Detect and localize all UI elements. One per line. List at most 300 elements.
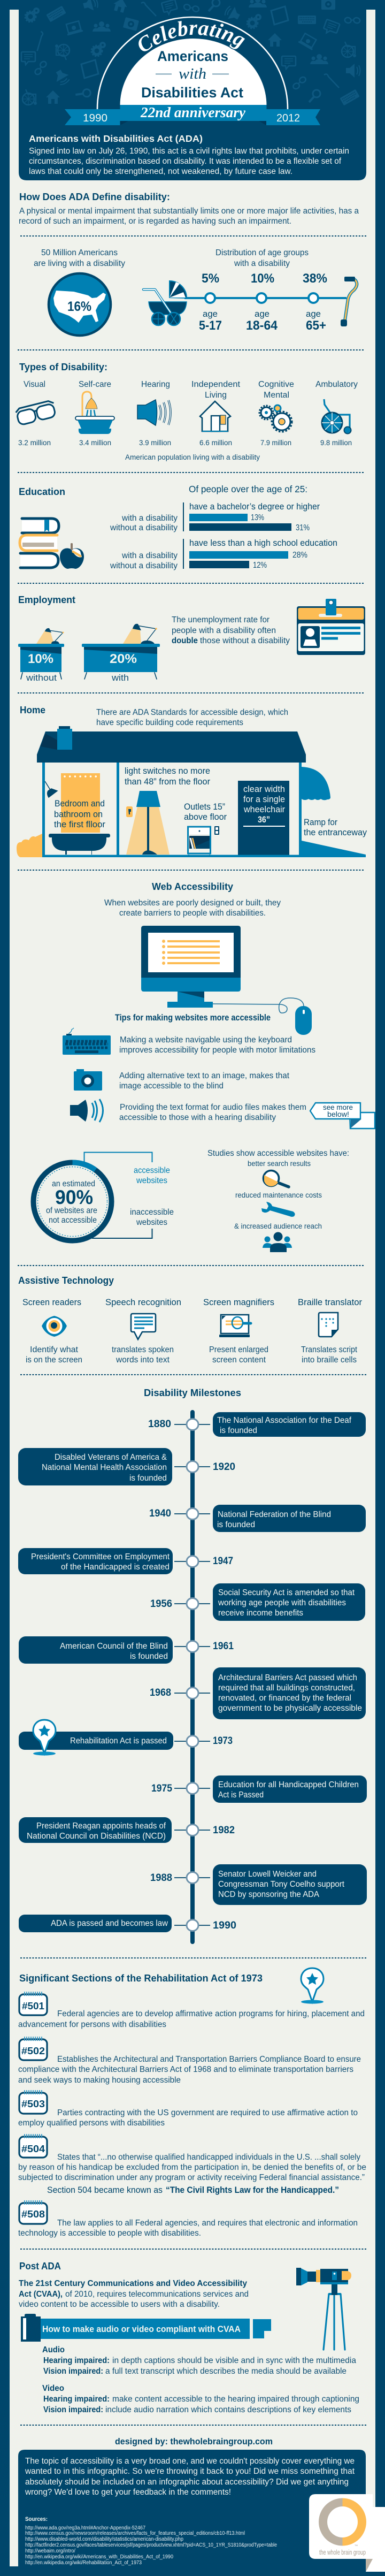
logo: the whole brain group: TM (355, 2544, 358, 2547)
milestone 1988: Congressman Tony Coelho support (218, 1880, 345, 1889)
definition text (19, 207, 359, 226)
label: better search: better search results (248, 1160, 311, 1168)
icon: keyboard (63, 1028, 111, 1055)
intro text: When websites are poorly designed or built, they (104, 898, 281, 908)
chart labels: accessible (134, 1166, 170, 1175)
milestone 1975: Act is Passed (218, 1790, 264, 1800)
tip: keyboard text: Making a website navigable using the keyboard (120, 1035, 292, 1045)
year 2012: 2012 (276, 112, 300, 124)
milestone 1975 (151, 1775, 367, 1803)
outlets label: above floor (184, 812, 227, 822)
milestone 1973: Rehabilitation Act is passed (70, 1736, 167, 1746)
column labels: Cognitive (258, 380, 294, 389)
ramp label (304, 818, 367, 837)
age values: age (255, 309, 270, 319)
section 504 (18, 2134, 366, 2195)
age values: 5% (202, 271, 219, 286)
heading: Disability Milestones (144, 1388, 241, 1398)
floor (42, 855, 366, 857)
section 504: subjected to discrimination under any program or activity receiving Federal financial assistance.” (18, 2173, 365, 2182)
icon: magnifier (263, 1171, 289, 1187)
milestone 1982 (19, 1817, 235, 1843)
label: audience: & increased audience reach (234, 1222, 322, 1230)
column labels (22, 1298, 363, 1307)
milestone 1920: Disabled Veterans of America & (55, 1453, 167, 1462)
closing text: wanted to in this infographic. So we're throwing it back to you! Did we miss something that (25, 2467, 355, 2476)
nightstand (188, 827, 211, 856)
counts: 9.8 million (320, 439, 352, 447)
milestone 1880: 1880 (148, 1418, 171, 1430)
curtain (61, 773, 100, 833)
icon: speech bubble (131, 1314, 156, 1339)
intro text (104, 898, 281, 918)
icon: people (263, 1232, 292, 1252)
floor lamp (126, 791, 170, 855)
bar chart: bachelor's degree: without a disability (110, 523, 178, 532)
video guidance (42, 2384, 359, 2414)
age timeline (184, 293, 346, 303)
stat text: 50 Million Americans (41, 248, 118, 257)
tip: audio text: Providing the text format for audio files makes them (120, 1103, 306, 1112)
chart labels: websites (136, 1176, 167, 1185)
connectors and nodes (174, 1419, 210, 1931)
awning (302, 767, 330, 800)
script word: with: with (179, 66, 206, 82)
icon: apple (60, 543, 84, 569)
counts: 3.4 million (79, 439, 111, 447)
milestone 1920: 1920 (213, 1461, 235, 1473)
section 504: Section 504 became known as (47, 2185, 163, 2195)
panel: types of disability (15, 362, 358, 461)
sources: http://en.wikipedia.org/wiki/Americans_with_Disabilities_Act_of_1990 (25, 2554, 173, 2560)
donut chart: 90 percent: not accessible (49, 1216, 97, 1225)
section 504: States that “...no otherwise qualified handicapped individuals in the U.S. ...shall solely (57, 2153, 360, 2162)
caption: American population living with a disability (125, 453, 260, 461)
unemployment text (172, 615, 290, 645)
icon: books (20, 519, 59, 568)
intro text (29, 147, 349, 176)
sources: http://www.census.gov/newsroom/releases/archives/facts_for_features_special_editions/cb10-ff13.html (25, 2531, 245, 2536)
sources: Sources: (25, 2516, 48, 2522)
light switch label: light switches no more (125, 766, 210, 776)
milestone 1940: is founded (217, 1520, 255, 1529)
bedroom label: the first flloor (54, 820, 106, 829)
chart title (215, 248, 309, 268)
ribbon (65, 105, 320, 125)
icon: house (200, 401, 230, 431)
walls and floor (44, 763, 301, 856)
panel: home (17, 705, 367, 857)
video guidance: Vision impaired: (43, 2405, 103, 2414)
audio guidance: Vision impaired: (43, 2367, 103, 2376)
CVAA text: video content to be accessible to users with a disability. (19, 2300, 220, 2309)
section 502: #502 (21, 2046, 45, 2056)
icon: glasses (15, 400, 57, 425)
unemployment text: double (172, 636, 198, 645)
age values: 18-64 (246, 318, 278, 333)
panel: age distribution (143, 248, 357, 333)
section 501: #501 (22, 2001, 44, 2011)
home intro text (96, 708, 288, 727)
icon: camera (74, 1069, 102, 1091)
milestone 1961: is founded (130, 1652, 168, 1661)
descriptions: screen content (212, 1355, 266, 1365)
bedroom label: Bedroom and (55, 799, 105, 809)
circle with US map: 16% (67, 299, 91, 314)
intro text: laws that could only be strengthened, not weakened, by future case law. (29, 167, 292, 176)
panel: disability milestones (18, 1388, 367, 1944)
closing text: absolutely should be included on an infographic about accessibility? Did we get anything (25, 2478, 349, 2487)
audio guidance: in depth captions should be visible and in sync with the multimedia (112, 2356, 356, 2365)
icon: mouse and cord (213, 998, 312, 1035)
section 508: technology is accessible to people with disabilities. (18, 2229, 201, 2238)
age values: age (306, 309, 321, 319)
timeline spine (190, 1410, 195, 1944)
milestone 1947: of the Handicapped is created (61, 1563, 170, 1572)
unemployment text: people with a disability often (172, 626, 276, 635)
section 501: advancement for persons with disabilities (18, 2020, 166, 2029)
sources: http://www.ada.gov/reg3a.html#Anchor-Appendix-52467 (25, 2525, 145, 2531)
age values: 10% (251, 271, 274, 286)
logo: the whole brain group: the whole brain group (319, 2548, 366, 2556)
tip: audio text: accessible to those with a hearing disability (119, 1113, 276, 1122)
bar chart: less than high school: with a disability (121, 551, 178, 560)
age values: age (203, 309, 218, 319)
studies text: Studies show accessible websites have: (207, 1149, 349, 1158)
column labels: Mental (264, 391, 289, 400)
chart title: with a disability (234, 259, 290, 268)
title: Disabilities Act: Disabilities Act (141, 85, 243, 101)
milestone 1988 (150, 1864, 367, 1905)
milestone 1956: receive income benefits (218, 1609, 303, 1618)
callout: see more below (310, 1103, 375, 1129)
descriptions (26, 1345, 358, 1365)
bar chart: less than high school: without a disability (110, 561, 178, 570)
sources (25, 2516, 277, 2566)
milestone 1947: 1947 (213, 1555, 233, 1567)
milestone 1920: National Mental Health Association (42, 1463, 167, 1472)
icon: laptop magnifier (219, 1315, 251, 1337)
section 503: #503 (21, 2099, 45, 2109)
section 504: by reason of his handicap be excluded from the participation in, be denied the benefits of, or be (18, 2163, 366, 2172)
section 501: Federal agencies are to develop affirmative action programs for hiring, placement and (57, 2009, 365, 2018)
age values: 65+ (306, 318, 326, 333)
white dome (120, 39, 266, 105)
milestone 1961 (19, 1636, 234, 1664)
panel: post ADA (19, 2261, 359, 2414)
desk: with a disability: 20% (110, 652, 137, 666)
unemployment text: those without a disability (200, 636, 290, 645)
counts: 3.9 million (139, 439, 171, 447)
counts: 3.2 million (18, 439, 51, 447)
closing text: The topic of accessibility is a very broad one, and we couldn't possibly cover everything we (25, 2457, 355, 2466)
heading: Web Accessibility (152, 881, 233, 892)
bush (17, 834, 42, 857)
descriptions: Present enlarged (209, 1345, 268, 1354)
stat text (34, 248, 125, 268)
panel: web accessibility (33, 881, 375, 1252)
outlets label (184, 802, 227, 822)
panel: header (19, 0, 366, 180)
icon: speaker (137, 400, 171, 425)
intro text: create barriers to people with disabilities. (119, 909, 266, 918)
bar chart: bachelor's degree: with a disability (121, 514, 178, 523)
icon: monitor (141, 926, 241, 1008)
sources: http://factfinder2.census.gov/faces/tableservices/jsf/pages/productview.xhtml?pid=ACS_10_1YR_S1810&prodType=table (25, 2542, 277, 2548)
light switch label (125, 766, 210, 787)
descriptions: Identify what (30, 1345, 79, 1354)
column labels: Hearing (141, 380, 170, 389)
milestone 1956: 1956 (150, 1598, 172, 1610)
panel: assistive technology (18, 1275, 363, 1365)
milestone 1988: NCD by sponsoring the ADA (218, 1890, 320, 1899)
milestone 1988: 1988 (150, 1872, 172, 1884)
icon: location pin (33, 1720, 56, 1755)
icon: ID badge (297, 599, 365, 655)
milestone 1982: President Reagan appoints heads of (36, 1822, 166, 1831)
arch outline (97, 17, 288, 110)
section 502 (18, 2037, 361, 2085)
logo: the whole brain group (309, 2494, 385, 2572)
heading: Types of Disability: (19, 362, 107, 372)
heading: how does ADA define disability: How Does ADA Define disability: (19, 192, 170, 202)
bar chart: bachelor's degree: have a bachelor’s degree or higher (189, 502, 320, 512)
panel: rehabilitation act sections (18, 1968, 366, 2238)
CVAA text: The 21st Century Communications and Video Accessibility (19, 2279, 247, 2288)
desk: without a disability (18, 628, 64, 683)
video guidance: Hearing impaired: (43, 2395, 110, 2404)
roof shadow (41, 734, 57, 750)
section 502: compliance with the Architectural Barriers Act of 1968 and to eliminate transportation barriers (18, 2065, 353, 2074)
audio guidance: Hearing impaired: (43, 2356, 110, 2365)
counts (18, 439, 352, 447)
door label: clear width (243, 784, 285, 794)
label: reduced costs: reduced maintenance costs (235, 1191, 322, 1199)
column labels: Ambulatory (315, 380, 358, 389)
chart labels: websites (136, 1218, 167, 1227)
tip: keyboard text (119, 1035, 315, 1055)
CVAA text (19, 2279, 249, 2309)
icon: cane (341, 277, 357, 326)
script: 22nd anniversary: 22nd anniversary (140, 104, 246, 120)
descriptions: translates spoken (112, 1345, 174, 1354)
milestone 1947: President's Committee on Employment (31, 1552, 170, 1561)
icon: shower and tub (75, 392, 114, 434)
bar chart: less than high school (110, 538, 337, 570)
column labels: Living (205, 391, 227, 400)
tip: keyboard text: improves accessibility for people with motor limitations (119, 1046, 315, 1055)
milestone 1968 (150, 1667, 366, 1719)
house illustration (17, 726, 367, 857)
descriptions: is on the screen (26, 1355, 82, 1365)
milestone 1961: American Council of the Blind (60, 1642, 168, 1651)
section 504: #504 (21, 2144, 45, 2154)
milestone 1973 (19, 1720, 233, 1755)
section 503: Parties contracting with the US government are required to use affirmative action to (57, 2108, 358, 2117)
desk: without a disability: 10% (28, 652, 53, 666)
ramp (302, 841, 366, 857)
tip: image text: Adding alternative text to an image, makes that (119, 1071, 290, 1080)
banner: film strip: How to make audio or video compliant with CVAA (42, 2325, 241, 2334)
ramp label: Ramp for (304, 818, 337, 827)
milestone 1920: is founded (129, 1474, 167, 1483)
door label (243, 784, 285, 827)
age values: 38% (303, 271, 327, 286)
definition text: record of such an impairment, or is regarded as having such an impairment. (19, 217, 291, 226)
icon: wheelchair (322, 399, 351, 433)
section 502: Establishes the Architectural and Transportation Barriers Compliance Board to ensure (57, 2055, 361, 2064)
bar chart: less than high school: have less than a high school education (189, 538, 337, 548)
tip: image text (119, 1071, 290, 1091)
age values: 5-17 (199, 318, 222, 333)
video guidance: Video (42, 2384, 64, 2393)
section 508: The law applies to all Federal agencies, and requires that electronic and information (57, 2219, 358, 2228)
icon: gears (259, 405, 292, 432)
milestone 1968: Architectural Barriers Act passed which (218, 1673, 357, 1682)
light switch (126, 806, 133, 817)
sources: http://webaim.org/intro/ (25, 2548, 75, 2554)
home intro text: There are ADA Standards for accessible design, which (96, 708, 288, 717)
bedroom label: bathroom on (54, 810, 103, 819)
panel: 50 million stat (34, 248, 125, 336)
icon: location pin (301, 1968, 324, 2003)
milestone 1940: National Federation of the Blind (218, 1510, 331, 1519)
milestone 1880: is founded (220, 1426, 257, 1435)
bedroom label (54, 799, 106, 829)
milestone 1968: renovated, or financed by the federal (218, 1694, 351, 1703)
audio guidance: a full text transcript which describes the media should be available (105, 2367, 346, 2376)
sources: http://www.disabled-world.com/disability/statistics/american-disability.php (25, 2536, 183, 2542)
desk: with a disability (82, 624, 160, 683)
milestone 1920 (18, 1448, 235, 1485)
bathtub (49, 834, 110, 855)
heading: Employment (18, 595, 75, 605)
section 503: employ qualified persons with disabilities (18, 2118, 165, 2128)
bar chart: bachelor's degree: 13% (251, 513, 264, 522)
donut chart: 90 percent: an estimated (52, 1179, 95, 1188)
age values (199, 271, 327, 333)
section 504: “The Civil Rights Law for the Handicapped.” (166, 2185, 339, 2195)
counts: 7.9 million (260, 439, 291, 447)
intro text: Signed into law on July 26, 1990, this act is a civil rights law that prohibits, under certain (29, 147, 349, 156)
milestone 1982: 1982 (213, 1824, 235, 1836)
milestone 1956 (150, 1583, 365, 1621)
banner: film strip (21, 2314, 271, 2342)
script heading: Celebrating: Celebrating (138, 21, 245, 51)
panel: footer (18, 2450, 385, 2576)
milestone 1956: Social Security Act is amended so that (218, 1588, 355, 1597)
milestone 1973: 1973 (213, 1735, 233, 1747)
outlets label: Outlets 15” (184, 802, 225, 812)
chart labels: inaccessible (130, 1208, 174, 1217)
video guidance: make content accessible to the hearing impaired through captioning (112, 2395, 359, 2404)
closing text: wrong? We'd love to get your feedback in the comments! (25, 2488, 231, 2497)
donut chart: 90 percent: 90% (55, 1186, 93, 1208)
door label: 36” (258, 815, 270, 825)
milestone 1975: Education for all Handicapped Children (218, 1780, 359, 1789)
column labels: Independent (191, 380, 241, 389)
icon: wrench (261, 1202, 295, 1217)
donut chart: 90 percent (33, 1162, 111, 1240)
title: Americans: Americans (157, 48, 228, 64)
donut chart: 90 percent: of websites are (46, 1206, 97, 1215)
milestone 1990 (19, 1915, 236, 1932)
intro heading: Americans with Disabilities Act (ADA) (29, 133, 203, 144)
circle with US map (49, 273, 111, 336)
door label: wheelchair (243, 805, 285, 814)
milestone 1880: The National Association for the Deaf (217, 1416, 352, 1425)
counts: 6.6 million (199, 439, 232, 447)
milestone 1968: required that all buildings constructed, (218, 1683, 355, 1693)
panel: education (19, 484, 337, 570)
heading: Education (19, 486, 65, 497)
intro text: circumstances, discrimination based on disability. It was intended to be a flexible set of (29, 157, 342, 166)
icon: stroller (143, 281, 187, 325)
audio guidance (42, 2345, 356, 2376)
CVAA text: of 2010, requires telecommunications services and (65, 2290, 249, 2299)
bar chart: less than high school: 28% (292, 551, 307, 560)
section 502: and seek ways to making housing accessible (18, 2076, 181, 2085)
column labels (24, 380, 358, 400)
heading: Significant Sections of the Rehabilitation Act of 1973 (19, 1973, 263, 1984)
ramp label: the entranceway (304, 828, 367, 837)
bar chart: bachelor's degree: 31% (296, 523, 310, 532)
callout: see more below: below! (327, 1110, 349, 1118)
unemployment text: The unemployment rate for (172, 615, 270, 624)
designer credit: designed by: thewholebraingroup.com (115, 2436, 273, 2447)
heading: Post ADA (19, 2261, 61, 2272)
icon: eye (42, 1316, 67, 1337)
heading: Home (20, 705, 45, 715)
column labels: Self-care (79, 380, 111, 389)
panel: employment (18, 595, 365, 683)
audio guidance: Audio (42, 2345, 65, 2354)
bar chart: less than high school: 12% (253, 561, 267, 570)
milestone 1961: 1961 (213, 1640, 234, 1652)
tip: image text: image accessible to the blind (119, 1081, 224, 1091)
sources: http://en.wikipedia.org/wiki/Rehabilitation_Act_of_1973 (25, 2560, 142, 2566)
home intro text: have specific building code requirements (96, 718, 243, 727)
milestone 1982: National Council on Disabilities (NCD) (27, 1832, 166, 1841)
descriptions: Translates script (301, 1345, 358, 1354)
milestone 1956: working age people with disabilities (218, 1598, 346, 1607)
tips heading: Tips for making websites more accessible (115, 1013, 271, 1023)
CVAA text: Act (CVAA), (19, 2290, 63, 2299)
light switch label: than 48” from the floor (125, 777, 210, 787)
decorative icon pattern (21, 0, 360, 105)
column labels: Screen magnifiers (203, 1298, 274, 1307)
descriptions: into braille cells (302, 1355, 357, 1365)
icon: braille page (319, 1313, 338, 1337)
milestone 1990: ADA is passed and becomes law (51, 1919, 168, 1928)
icon: audio speaker (70, 1099, 103, 1122)
milestone 1975: 1975 (151, 1782, 172, 1794)
desk: with a disability: with (111, 673, 129, 683)
door label: for a single (243, 795, 285, 804)
milestone 1988: Senator Lowell Weicker and (218, 1870, 317, 1879)
video guidance: include audio narration which contains descriptions of key elements (105, 2405, 351, 2414)
year 1990: 1990 (83, 112, 107, 124)
column labels: Visual (24, 380, 45, 389)
chart title: Distribution of age groups (215, 248, 309, 257)
chimney (57, 726, 72, 750)
chart title: Of people over the age of 25: (189, 484, 307, 494)
milestone 1940 (149, 1505, 366, 1532)
footer background (18, 2450, 366, 2576)
outlet (214, 826, 219, 835)
section 503 (18, 2090, 358, 2128)
milestone 1968: government to be physically accessible (218, 1704, 362, 1713)
